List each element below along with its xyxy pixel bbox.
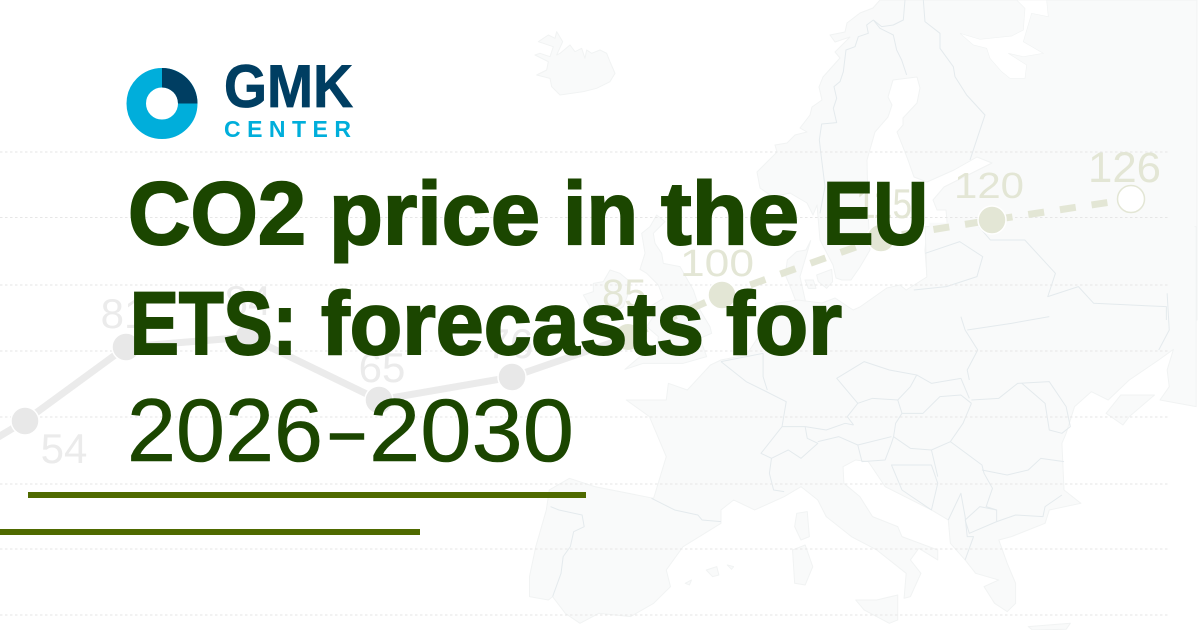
accent underline: upper [28,492,586,498]
Iceland [535,32,615,95]
logo sub-wordmark: CENTER [224,116,351,142]
line chart: forecast price: 100 [680,243,754,285]
title [127,163,928,480]
logo wordmark: GMK [224,53,353,120]
title: EU [823,163,928,263]
title: 2026 [127,380,323,480]
title: for [726,273,842,373]
line chart: historic price: 76 [487,320,533,367]
title: ETS: [130,273,297,373]
title: forecasts [321,273,704,373]
title: in [563,163,638,263]
chart grid lines [0,152,1170,615]
line chart: forecast price [602,144,1161,350]
line chart: historic price: 84 [225,277,271,324]
title: – [330,378,364,478]
line chart: historic price: 54 [41,425,87,472]
line chart: forecast price: 85 [602,272,646,316]
background map of Europe [529,0,1197,630]
logo: GMK Center [136,53,353,142]
Denmark and Danish islands [785,241,833,307]
line chart: forecast price: 115 [856,180,912,227]
Scandinavia, Finland and Russia [757,0,1197,320]
line chart: forecast price: 120 [954,165,1024,206]
line chart: forecast price: 126 [1088,144,1161,192]
accent underline: lower [0,529,420,535]
Great Britain and Ireland [583,215,712,369]
line chart: historic price [0,277,628,472]
line chart: historic price: 65 [359,344,405,391]
Baltic state borders [914,227,1166,320]
line chart: historic price: 81 [101,290,147,337]
title: price [329,163,540,263]
title: 2030 [369,380,574,480]
icon: donut logo mark [136,68,198,129]
continental Europe [529,223,1196,630]
title: CO2 [128,163,306,263]
title: the [661,163,799,263]
